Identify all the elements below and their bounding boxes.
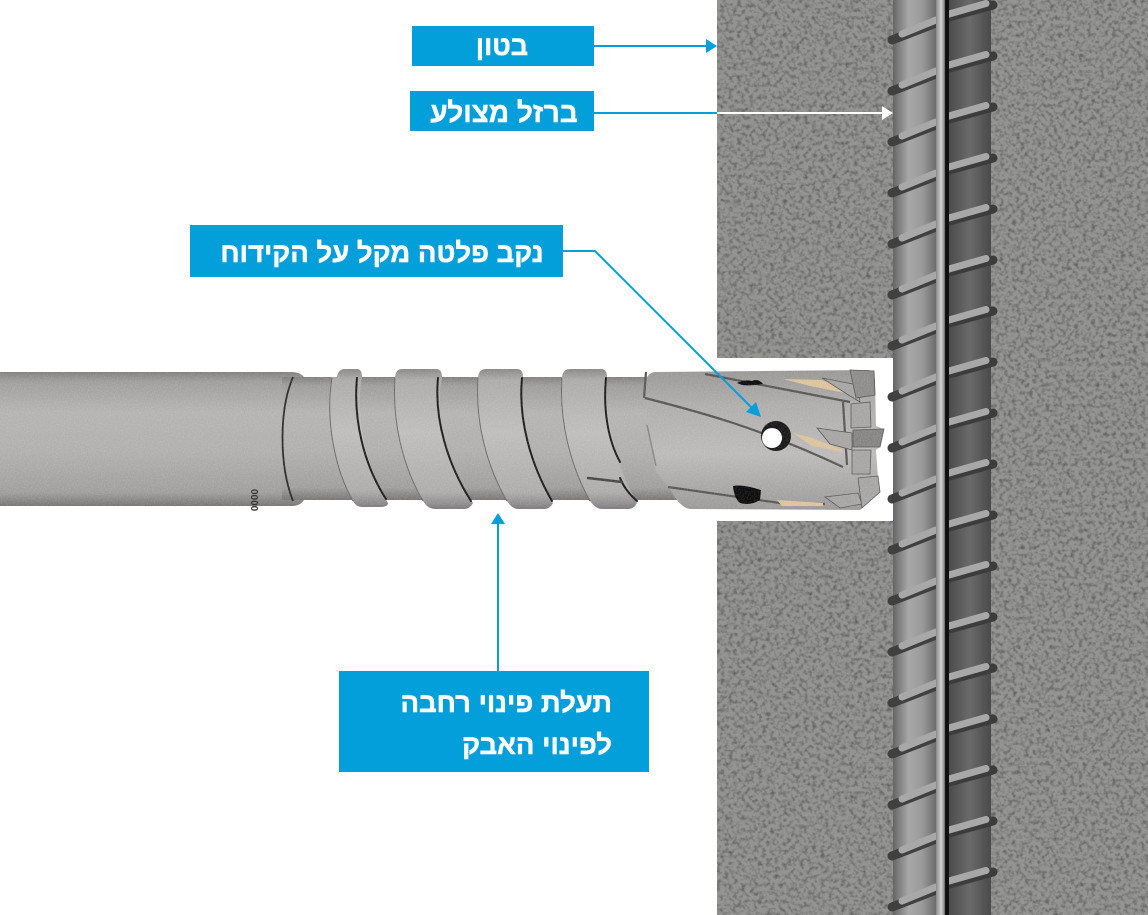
arrow: dust channel [491, 513, 505, 671]
label: dust channel: לפינוי האבק [462, 729, 612, 760]
concrete wall [717, 0, 1148, 915]
drill shank [0, 372, 304, 506]
land left edges [330, 378, 590, 501]
arrow: plate hole [563, 251, 761, 417]
label: plate hole [190, 225, 563, 277]
arrow: rebar [594, 106, 893, 120]
label: dust channel: תעלת פינוי רחבה [400, 687, 612, 718]
spiral lands [330, 369, 637, 509]
cutter head [645, 370, 884, 510]
arrow: concrete [594, 39, 717, 53]
rebar [880, 0, 1005, 915]
label: ribbed rebar [410, 91, 594, 131]
dust slots [733, 380, 763, 504]
drilled hole [717, 358, 897, 521]
drill bit [0, 369, 884, 512]
collar groove [282, 377, 293, 501]
shank marking: 0000 [248, 489, 259, 512]
label: plate hole: נקב פלטה מקל על הקידוח [220, 237, 544, 268]
spiral core [282, 377, 680, 500]
flute shadows [356, 378, 637, 501]
carbide tips [817, 370, 884, 508]
texture on drill [0, 369, 884, 510]
head flutes [644, 372, 850, 504]
label: concrete [412, 26, 594, 66]
brazing [777, 379, 850, 506]
label: dust channel [339, 671, 649, 772]
label: ribbed rebar: ברזל מצולע [430, 97, 578, 128]
label: concrete: בטון [476, 31, 528, 61]
plate hole [761, 421, 791, 451]
